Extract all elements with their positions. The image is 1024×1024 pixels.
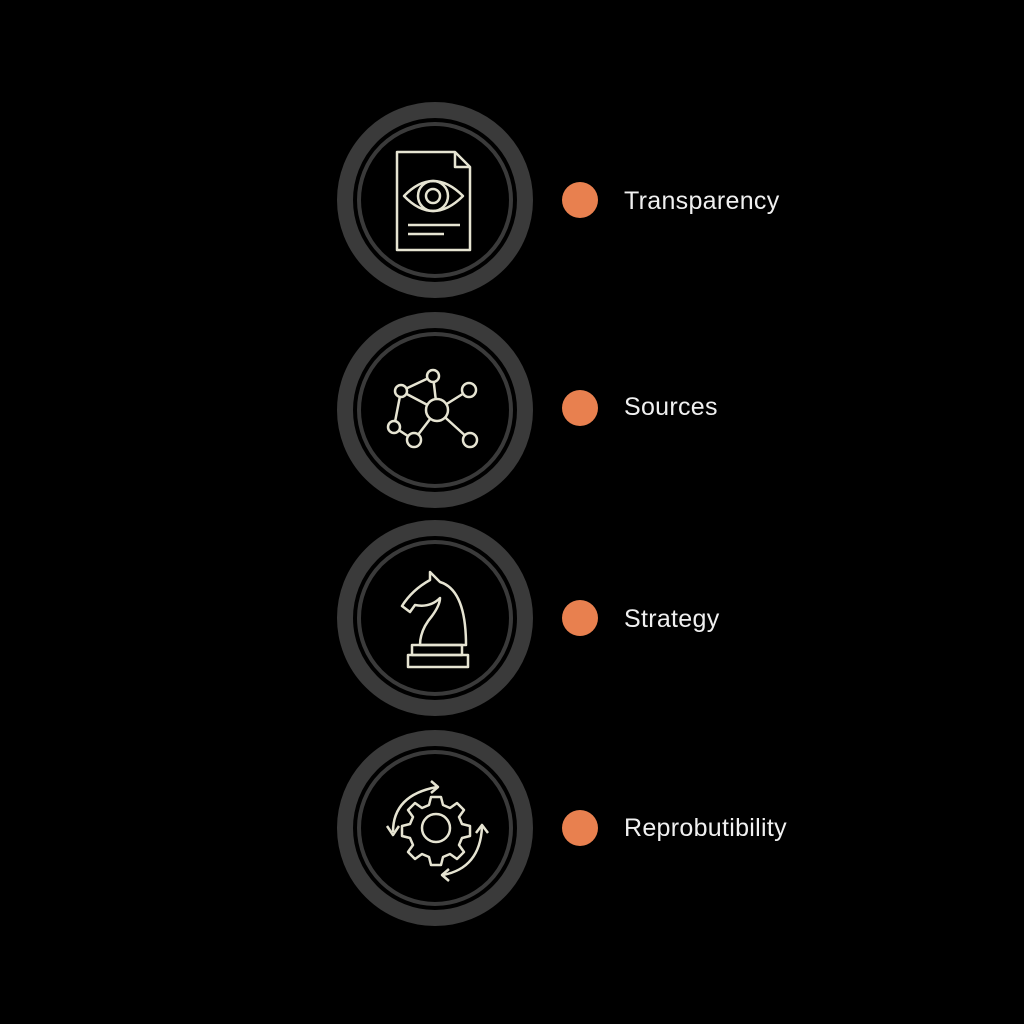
- item: Reprobutibility: [345, 738, 787, 918]
- icon: document with eye: [397, 152, 470, 250]
- bullet dot: [562, 810, 598, 846]
- item: Strategy: [345, 528, 720, 708]
- icon: chess knight: [402, 572, 468, 667]
- bullet dot: [562, 600, 598, 636]
- label: Strategy: [624, 605, 720, 633]
- bullet dot: [562, 390, 598, 426]
- circle frame 4: [345, 738, 525, 918]
- label: Sources: [624, 393, 718, 421]
- bullet dot: [562, 182, 598, 218]
- circle frame 3: [345, 528, 525, 708]
- item: Sources: [345, 320, 718, 500]
- circle frame 1: [345, 110, 525, 290]
- label: Reprobutibility: [624, 814, 787, 842]
- icon: network: [388, 370, 477, 447]
- item: Transparency: [345, 110, 780, 290]
- label: Transparency: [624, 187, 780, 215]
- icon: gear with cycle arrows: [387, 781, 488, 881]
- circle frame 2: [345, 320, 525, 500]
